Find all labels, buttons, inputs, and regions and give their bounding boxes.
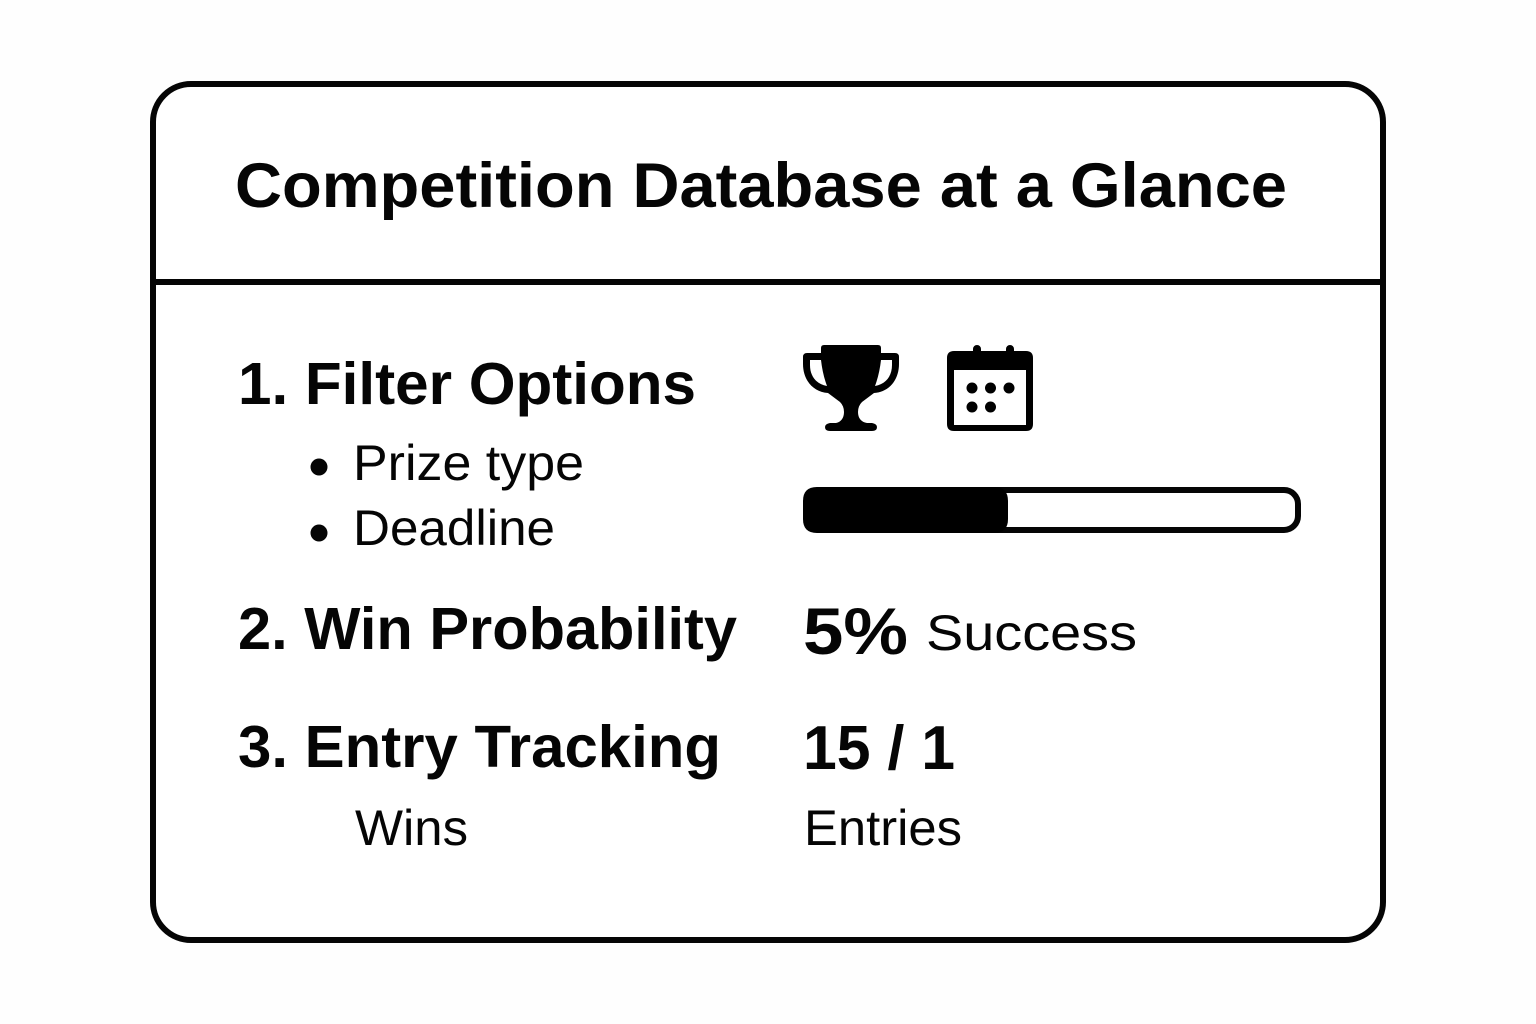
panel: database card — [153, 84, 1383, 940]
stat: entries to wins: 15 / 1 — [803, 714, 955, 783]
heading: entry tracking: 3. Entry Tracking — [238, 714, 721, 780]
stat: success rate: Success — [926, 605, 1137, 661]
title: Competition Database at a Glance — [235, 151, 1287, 221]
list: filter bullets — [310, 435, 584, 556]
stat: success rate — [803, 594, 1137, 668]
icon: trophy — [803, 345, 899, 431]
stat: success rate: 5% — [803, 594, 908, 668]
icon: calendar — [947, 345, 1033, 431]
heading: win probability: 2. Win Probability — [238, 596, 737, 662]
label: wins: Wins — [355, 800, 468, 856]
list: filter bullets: Deadline — [353, 500, 555, 556]
progress bar — [803, 487, 1298, 533]
label: entries: Entries — [804, 800, 962, 856]
heading: filter options: 1. Filter Options — [238, 351, 696, 417]
list: filter bullets: Prize type — [353, 435, 584, 491]
